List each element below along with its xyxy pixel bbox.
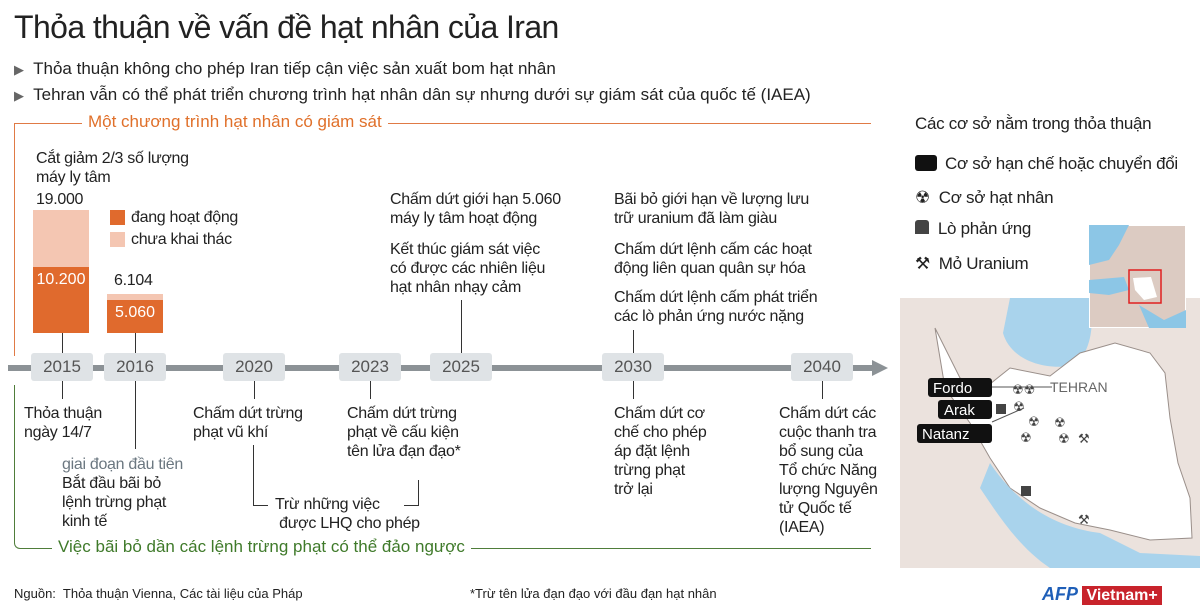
events above: máy ly tâm hoạt động [390,210,537,227]
legend: ⚒ Mỏ Uranium [915,254,1028,273]
text: có được các nhiên liệu [390,260,545,277]
green bracket [14,385,871,549]
text: Chấm dứt cơ [614,405,705,422]
timeline axis [8,360,888,376]
text: tử Quốc tế [779,500,852,517]
text: động liên quan quân sự hóa [614,260,806,277]
text: Bãi bỏ giới hạn về lượng lưu [614,191,809,208]
text: trữ uranium đã làm giàu [614,210,777,227]
centrifuge chart: 5.060 [115,304,155,321]
footnote: *Trừ tên lửa đạn đạo với đầu đạn hạt nhân [470,586,717,601]
map: Fordo [933,380,972,397]
UN bracket [253,445,268,506]
text: kinh tế [62,513,107,530]
map: Arak [944,402,975,419]
legend: Các cơ sở nằm trong thỏa thuận [915,114,1151,133]
text: Tổ chức Năng [779,462,877,479]
map: ☢ [1020,430,1032,445]
inset map [1089,225,1186,328]
text: tên lửa đạn đạo* [347,443,461,460]
text: 2016 [116,357,154,376]
text: được LHQ cho phép [279,515,420,532]
centrifuge chart: 10.200 [37,271,85,288]
text: Chấm dứt trừng [347,405,457,422]
text: trừng phạt [614,462,685,479]
text: 2023 [351,357,389,376]
centrifuge chart [33,149,238,333]
green heading: Việc bãi bỏ dần các lệnh trừng phạt có thể đảo ngược [58,537,465,556]
map: ⚒ [1078,431,1090,446]
map [900,298,1200,568]
text: Kết thúc giám sát việc [390,241,540,258]
orange heading: Một chương trình hạt nhân có giám sát [88,112,382,131]
text: 2025 [442,357,480,376]
text: 2040 [803,357,841,376]
orange bracket [14,123,871,356]
events above [390,191,561,227]
bullets [14,59,811,104]
legend [915,114,1178,273]
text: Chấm dứt lệnh cấm các hoạt [614,241,812,258]
map: ⚒ [1078,512,1090,527]
text: 2030 [614,357,652,376]
map: ☢ [1013,399,1025,414]
text: cuộc thanh tra [779,424,876,441]
logo: AFP Vietnam+ [1042,584,1158,604]
map: ☢☢ [1012,382,1035,397]
centrifuge chart: máy ly tâm [36,169,110,186]
year labels: 2015 [43,357,81,376]
text: Trừ những việc [275,496,380,513]
text: chế cho phép [614,424,706,441]
text: Bắt đầu bãi bỏ [62,475,161,492]
map: ☢ [1058,431,1070,446]
text: trở lại [614,481,653,498]
text: lệnh trừng phạt [62,494,166,511]
map: ☢ [1028,414,1040,429]
map: Natanz [922,426,970,443]
text: giai đoạn đầu tiên [62,456,183,473]
legend: Lò phản ứng [938,219,1031,238]
text: 2020 [235,357,273,376]
text: hạt nhân nhạy cảm [390,279,521,296]
year labels [31,353,93,381]
text: Chấm dứt các [779,405,876,422]
footer source: Nguồn: Thỏa thuận Vienna, Các tài liệu của Pháp [14,586,303,601]
connector lines [62,333,63,353]
events below: ngày 14/7 [24,424,92,441]
text: (IAEA) [779,519,824,536]
text: áp đặt lệnh [614,443,690,460]
centrifuge chart: 6.104 [114,272,153,289]
events below [24,405,102,441]
title: Thỏa thuận về vấn đề hạt nhân của Iran [14,9,559,45]
text: các lò phản ứng nước nặng [614,308,804,325]
centrifuge chart: Cắt giảm 2/3 số lượng [36,150,189,167]
text: bổ sung của [779,443,863,460]
legend: ☢ Cơ sở hạt nhân [915,188,1053,207]
text: phạt về cấu kiện [347,424,459,441]
centrifuge chart: 19.000 [36,191,83,208]
bullets: ▶ Tehran vẫn có thể phát triển chương trình hạt nhân dân sự nhưng dưới sự giám sát của quốc tế (IAEA) [14,85,811,104]
text: Chấm dứt lệnh cấm phát triển [614,289,817,306]
legend: Cơ sở hạn chế hoặc chuyển đổi [945,154,1178,173]
centrifuge chart: chưa khai thác [131,231,232,248]
centrifuge chart: đang hoạt động [131,209,238,226]
map: ☢ [1054,415,1066,430]
bullets: ▶ Thỏa thuận không cho phép Iran tiếp cận việc sản xuất bom hạt nhân [14,59,556,78]
events above: Chấm dứt giới hạn 5.060 [390,191,561,208]
map: TEHRAN [1050,379,1108,395]
text: phạt vũ khí [193,424,268,441]
text: lượng Nguyên [779,481,878,498]
text: Chấm dứt trừng [193,405,303,422]
events below: Thỏa thuận [24,405,102,422]
